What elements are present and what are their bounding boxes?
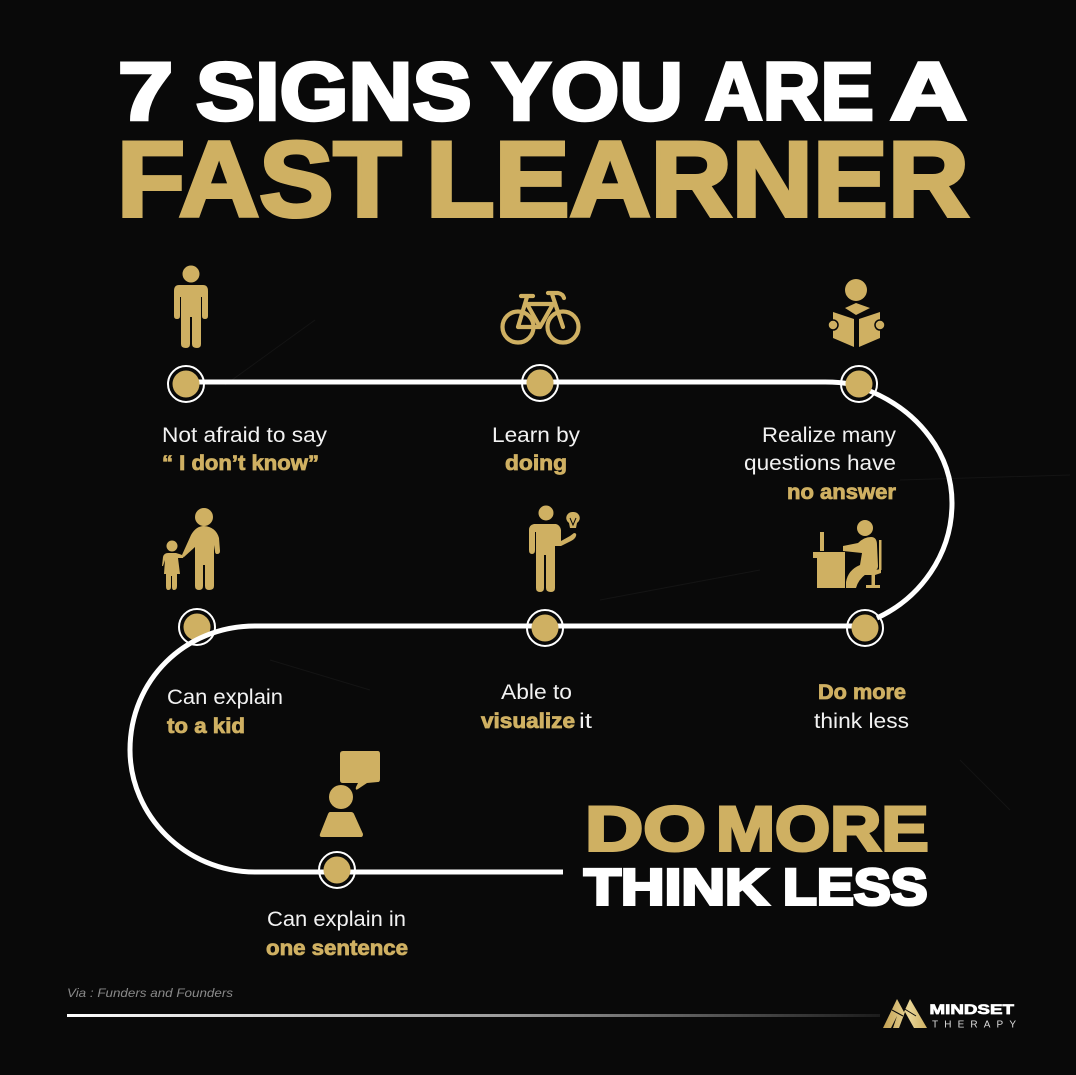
text: step 6: to a kid (167, 715, 245, 738)
text: step 6 (167, 686, 283, 738)
text: step 5: it (579, 710, 592, 733)
closing headline: MORE (716, 794, 929, 865)
closing headline: THINK (584, 858, 769, 915)
closing headline: LESS (783, 860, 928, 916)
text: step 2: Learn by (492, 424, 581, 447)
title (117, 46, 969, 240)
text: step 3: no answer (787, 481, 896, 504)
title: 7 (118, 47, 173, 138)
title: ARE (705, 47, 874, 138)
icon: person reading a book (828, 279, 885, 347)
text: step 3: questions have (744, 452, 896, 475)
title: A (890, 46, 967, 138)
text: step 5: visualize (481, 710, 575, 733)
text: step 5 (481, 681, 592, 733)
title: LEARNER (426, 120, 969, 239)
text: step 3 (744, 424, 897, 504)
logo: Mindset Therapy: MINDSET (930, 1002, 1014, 1017)
icon: adult holding child's hand (162, 508, 220, 590)
text: step 1: “ I don’t know” (162, 452, 319, 475)
text: step 7: one sentence (266, 937, 408, 960)
step 4 marker (847, 610, 883, 646)
step 6 marker (179, 609, 215, 645)
winding path line (130, 382, 952, 872)
closing headline (584, 794, 929, 916)
step 7 marker (319, 852, 355, 888)
text: step 5: Able to (501, 681, 572, 704)
text: step 1 (162, 424, 328, 475)
text: step 3: Realize many (762, 424, 897, 447)
step 5 marker (527, 610, 563, 646)
text: step 7 (266, 908, 408, 960)
icon: standing person (174, 266, 208, 348)
text: step 4 (814, 681, 909, 733)
step 2 marker (522, 365, 558, 401)
icon: person with speech bubble (320, 751, 380, 837)
icon: man with lightbulb idea (529, 506, 580, 592)
text: step 2 (492, 424, 581, 475)
title: YOU (492, 46, 683, 138)
text: step 6: Can explain (167, 686, 283, 709)
footer rule (67, 1014, 880, 1017)
text: step 2: doing (505, 452, 567, 475)
logo: Mindset Therapy: THERAPY (932, 1020, 1016, 1030)
text: step 4: Do more (818, 681, 906, 704)
title: SIGNS (196, 46, 472, 138)
source credit: Via : Funders and Founders (67, 986, 233, 1000)
text: step 1: Not afraid to say (162, 424, 328, 447)
step 3 marker (841, 366, 877, 402)
logo: Mindset Therapy (883, 999, 1016, 1030)
text: step 4: think less (814, 710, 909, 733)
title: FAST (117, 120, 401, 240)
text: step 7: Can explain in (267, 908, 406, 931)
step 1 marker (168, 366, 204, 402)
icon: person working at desk (813, 520, 882, 588)
icon: bicycle (502, 293, 578, 342)
closing headline: DO (585, 795, 706, 864)
